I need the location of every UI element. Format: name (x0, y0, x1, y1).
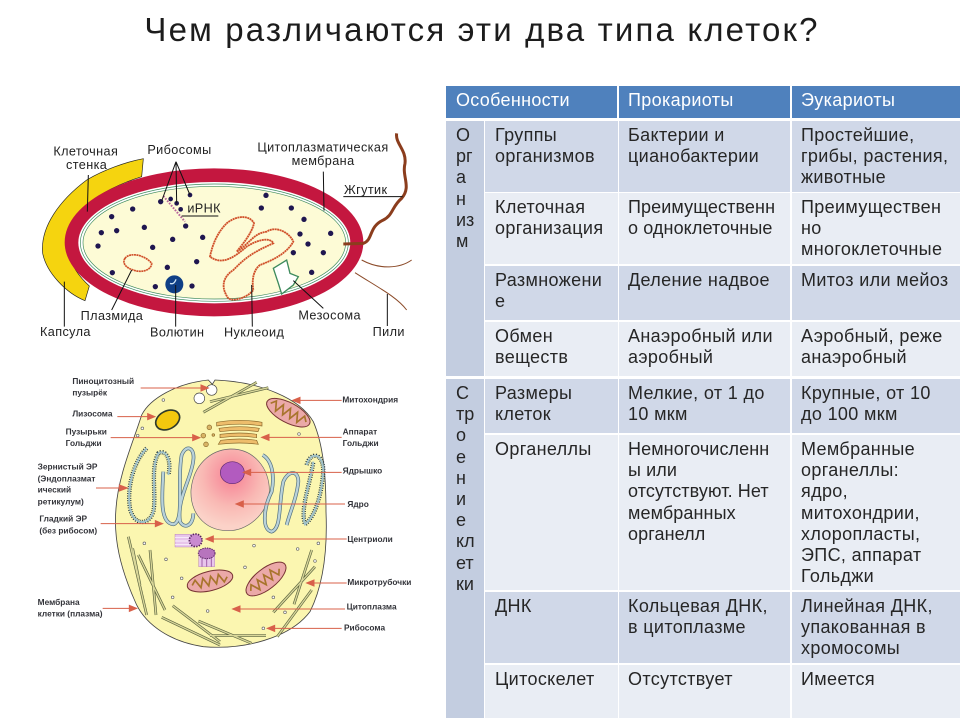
section label: cell structure: С (456, 383, 469, 403)
rough ER left (129, 448, 169, 522)
table: comparison of prokaryotes and eukaryotes: хлоропласты, (801, 524, 920, 544)
row: DNA (485, 592, 618, 663)
arrows (96, 385, 347, 631)
labels: prokaryote: Волютин (150, 326, 204, 340)
row: metabolism: Обмен (495, 326, 553, 346)
Golgi apparatus (217, 420, 262, 444)
table: comparison of prokaryotes and eukaryotes: ЭПС, аппарат (801, 545, 921, 565)
mitochondrion top (262, 393, 314, 433)
labels: eukaryote: (Эндоплазмат (38, 474, 96, 484)
table: comparison of prokaryotes and eukaryotes: животные (801, 167, 886, 187)
pinocytic vesicles (194, 385, 217, 404)
table: comparison of prokaryotes and eukaryotes: Отсутствует (628, 669, 733, 689)
header: features: Особенности (456, 90, 570, 110)
table: comparison of prokaryotes and eukaryotes: Аэробный, реже (801, 326, 943, 346)
table: comparison of prokaryotes and eukaryotes: Преимущественн (628, 197, 775, 217)
row: reproduction (485, 266, 618, 320)
table: comparison of prokaryotes and eukaryotes: отсутствуют. Нет (628, 481, 769, 501)
table: comparison of prokaryotes and eukaryotes: Мелкие, от 1 до (628, 383, 765, 403)
section label: cell structure: ет (456, 553, 474, 573)
labels: eukaryote: Центриоли (347, 534, 393, 544)
section label: cell structure: тр (456, 404, 474, 424)
labels: prokaryote: Рибосомы (147, 143, 212, 157)
row: cytoskeleton (485, 665, 618, 718)
section label: organism: О (456, 125, 470, 145)
microtubules (128, 382, 315, 645)
table: comparison of prokaryotes and eukaryotes: Линейная ДНК, (801, 596, 933, 616)
nucleolus (220, 462, 244, 484)
labels: eukaryote: Цитоплазма (347, 602, 397, 612)
Golgi vesicles (201, 425, 215, 447)
labels: prokaryote: иРНК (187, 202, 221, 216)
table: comparison of prokaryotes and eukaryotes: Кольцевая ДНК, (628, 596, 768, 616)
labels: prokaryote: стенка (66, 158, 108, 172)
section label: organism (446, 121, 484, 376)
labels: eukaryote: пузырёк (72, 387, 108, 397)
table: comparison of prokaryotes and eukaryotes: хромосомы (801, 638, 900, 658)
pili (355, 260, 412, 310)
table: comparison of prokaryotes and eukaryotes: Митоз или мейоз (801, 270, 949, 290)
row: cell size: Размеры (495, 383, 572, 403)
table: comparison of prokaryotes and eukaryotes: цианобактерии (628, 146, 759, 166)
labels: eukaryote: Зернистый ЭР (38, 462, 98, 472)
section label: organism: м (456, 231, 468, 251)
table: comparison of prokaryotes and eukaryotes: грибы, растения, (801, 146, 948, 166)
table: comparison of prokaryotes and eukaryotes: ы или (628, 460, 677, 480)
labels: prokaryote: Нуклеоид (224, 326, 284, 340)
section label: cell structure: е (456, 447, 466, 467)
row: cell size: клеток (495, 404, 551, 424)
table: comparison of prokaryotes and eukaryotes: ядро, (801, 481, 848, 501)
table: comparison of prokaryotes and eukaryotes: до 100 мкм (801, 404, 898, 424)
mesosome (273, 260, 298, 294)
row: cellular organization: организация (495, 218, 603, 238)
table: comparison of prokaryotes and eukaryotes: органелл (628, 524, 705, 544)
labels: eukaryote: Микротрубочки (347, 577, 411, 587)
cytoplasm and membrane (78, 182, 350, 303)
diagram: prokaryotic cell (40, 133, 412, 340)
labels: eukaryote: (без рибосом) (39, 525, 97, 535)
table: comparison of prokaryotes and eukaryotes (446, 86, 960, 718)
row: reproduction: е (495, 291, 505, 311)
labels: prokaryote: Клеточная (53, 145, 118, 159)
table: comparison of prokaryotes and eukaryotes: Крупные, от 10 (801, 383, 931, 403)
section label: cell structure: е (456, 510, 466, 530)
table: comparison of prokaryotes and eukaryotes: Бактерии и (628, 125, 725, 145)
smooth ER right (263, 455, 298, 532)
table: comparison of prokaryotes and eukaryotes: анаэробный (801, 347, 907, 367)
table: comparison of prokaryotes and eukaryotes: митохондрии, (801, 503, 920, 523)
table: comparison of prokaryotes and eukaryotes: но (801, 218, 822, 238)
labels: prokaryote: Цитоплазматическая (257, 141, 389, 155)
section label: organism: н (456, 189, 466, 209)
row: organism groups: Группы (495, 125, 557, 145)
labels: eukaryote: Пиноцитозный (72, 376, 134, 386)
table: comparison of prokaryotes and eukaryotes: Мембранные (801, 439, 915, 459)
ribosomes (95, 193, 333, 289)
leader lines (64, 162, 403, 327)
table: comparison of prokaryotes and eukaryotes: 10 мкм (628, 404, 688, 424)
diagram: eukaryotic cell (38, 376, 411, 648)
header: prokaryotes: Прокариоты (628, 90, 734, 110)
section label: organism: рг (456, 146, 473, 166)
labels: prokaryote: Мезосома (298, 308, 361, 322)
row: cytoskeleton: Цитоскелет (495, 669, 595, 689)
nucleoid (210, 217, 293, 300)
labels: eukaryote (38, 376, 411, 633)
lysosome (152, 406, 183, 434)
smooth ER left (162, 448, 194, 526)
section label: cell structure: и (456, 489, 466, 509)
row: cell size (485, 379, 618, 433)
section label: cell structure: кл (456, 531, 475, 551)
labels: eukaryote: ретикулум) (38, 496, 84, 506)
labels: eukaryote: ический (38, 484, 71, 494)
labels: prokaryote: Капсула (40, 325, 91, 339)
table: comparison of prokaryotes and eukaryotes: органеллы: (801, 460, 899, 480)
labels: eukaryote: Митохондрия (342, 394, 398, 404)
mRNA strand (163, 196, 185, 222)
row: organelles: Органеллы (495, 439, 592, 459)
flagellum (343, 133, 406, 244)
header: eukaryotes: Эукариоты (801, 90, 895, 110)
labels: eukaryote: Мембрана (38, 597, 80, 607)
labels: eukaryote: клетки (плазма) (38, 609, 103, 619)
section label: cell structure: н (456, 468, 466, 488)
labels: eukaryote: Ядро (347, 499, 369, 509)
table: comparison of prokaryotes and eukaryotes: в цитоплазме (628, 617, 746, 637)
labels: prokaryote (40, 141, 405, 340)
labels: prokaryote: Пили (373, 325, 405, 339)
table: comparison of prokaryotes and eukaryotes: Немногочисленн (628, 439, 769, 459)
table: comparison of prokaryotes and eukaryotes: многоклеточные (801, 239, 942, 259)
table: comparison of prokaryotes and eukaryotes: Преимуществен (801, 197, 941, 217)
table: comparison of prokaryotes and eukaryotes: Имеется (801, 669, 875, 689)
table: comparison of prokaryotes and eukaryotes: упакованная в (801, 617, 926, 637)
table: comparison of prokaryotes and eukaryotes: о одноклеточные (628, 218, 772, 238)
nucleus (191, 449, 269, 531)
mitochondria lower (185, 566, 235, 596)
row: metabolism (485, 322, 618, 376)
centrioles (175, 534, 215, 567)
ribosomes (136, 399, 320, 630)
labels: eukaryote: Гладкий ЭР (39, 514, 87, 524)
table: comparison of prokaryotes and eukaryotes: Простейшие, (801, 125, 914, 145)
labels: eukaryote: Аппарат (343, 427, 377, 437)
header: prokaryotes (619, 86, 790, 118)
row: cellular organization: Клеточная (495, 197, 585, 217)
table: comparison of prokaryotes and eukaryotes: Гольджи (801, 566, 874, 586)
labels: eukaryote: Пузырьки (66, 427, 107, 437)
labels: eukaryote: Ядрышко (343, 466, 382, 476)
row: organelles (485, 435, 618, 590)
header: features (446, 86, 617, 118)
section label: organism: а (456, 167, 466, 187)
row: organism groups (485, 121, 618, 192)
labels: eukaryote: Лизосома (72, 409, 113, 419)
row: DNA: ДНК (495, 596, 532, 616)
labels: eukaryote: Рибосома (344, 623, 385, 633)
row: organism groups: организмов (495, 146, 595, 166)
cell body (115, 380, 326, 647)
volutin (165, 275, 183, 293)
header: eukaryotes (792, 86, 960, 118)
section label: organism: из (456, 210, 474, 230)
row: cellular organization (485, 193, 618, 264)
title: Чем различаются эти два типа клеток? (144, 11, 820, 48)
row: metabolism: веществ (495, 347, 568, 367)
section label: cell structure (446, 379, 484, 718)
plasmid (124, 255, 152, 271)
table: comparison of prokaryotes and eukaryotes: Деление надвое (628, 270, 770, 290)
labels: prokaryote: Жгутик (344, 183, 387, 197)
row: reproduction: Размножени (495, 270, 602, 290)
labels: prokaryote: Плазмида (81, 309, 144, 323)
labels: eukaryote: Гольджи (343, 438, 379, 448)
table: comparison of prokaryotes and eukaryotes: Анаэробный или (628, 326, 773, 346)
labels: prokaryote: мембрана (292, 154, 355, 168)
table: comparison of prokaryotes and eukaryotes: мембранных (628, 503, 736, 523)
section label: cell structure: ки (456, 574, 474, 594)
capsule (42, 159, 143, 301)
section label: cell structure: о (456, 425, 466, 445)
rough ER right (304, 456, 323, 524)
table: comparison of prokaryotes and eukaryotes: аэробный (628, 347, 713, 367)
cell wall (65, 168, 363, 316)
labels: eukaryote: Гольджи (66, 438, 102, 448)
